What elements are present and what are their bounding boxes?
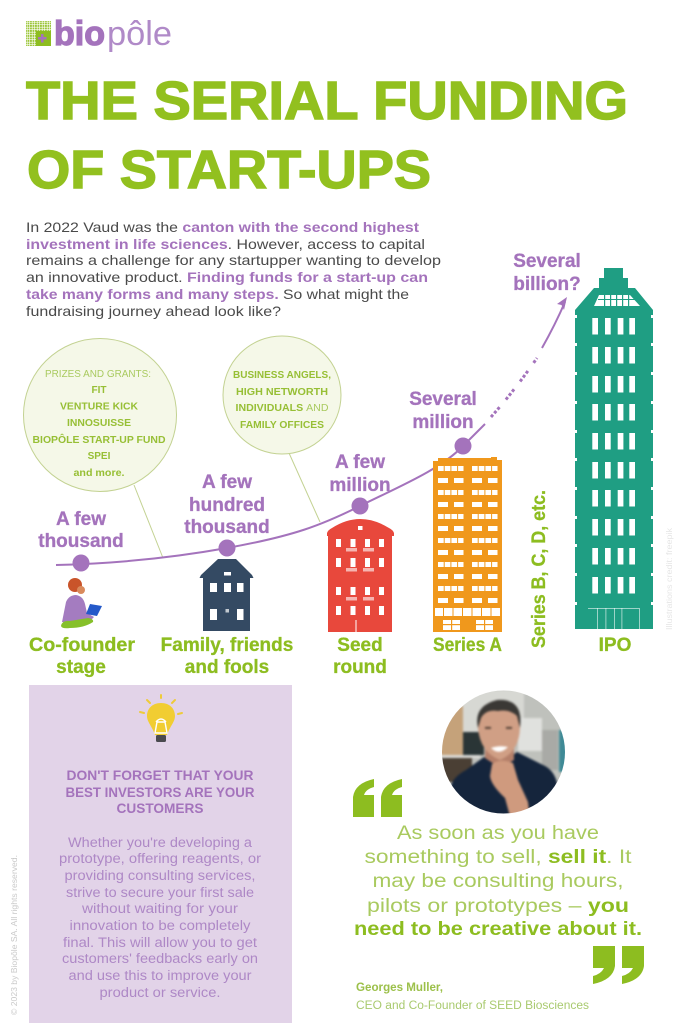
callout: business angels: INDIVIDUALS AND [236,403,328,414]
logo: biopôle: bio [54,15,105,53]
body text: first sale advice: without waiting for your [81,901,239,916]
body text: first sale advice: product or service. [100,985,220,1000]
stage labels: and fools [185,657,269,678]
body text: first sale advice: prototype, offering reagents, or [59,851,262,866]
quote text: pilots or prototypes – you [367,896,629,917]
amount labels: million [329,475,391,496]
stage labels: Series A [433,635,502,656]
callout: business angels: FAMILY OFFICES [240,420,324,431]
title [26,71,628,200]
attribution [356,982,589,1012]
icon: series A building (orange) [433,457,502,632]
attribution: Georges Muller, [356,982,443,994]
callout: prizes and grants: FIT [92,385,106,396]
amount labels: Several [409,389,477,410]
funding growth curve with arrow [56,297,567,565]
quote text [354,823,642,940]
amount labels: billion? [513,274,581,295]
callout: prizes and grants: INNOSUISSE [67,418,131,429]
amount labels: Several [513,251,581,272]
heading: investors are customers: DON'T FORGET THAT YOUR [66,768,254,783]
callout: prizes and grants: PRIZES AND GRANTS: [45,369,151,380]
intro text: investment in life sciences . However, access to capital [26,236,425,252]
intro text: an innovative product. Finding funds for a start-up can [26,269,428,285]
stage labels [29,490,631,678]
quote text: As soon as you have [397,823,599,844]
intro text: take many forms and many steps. So what might the [26,286,409,302]
icon: seed round building (red) [327,519,394,632]
illustration credit: Illustrations credit: freepik [664,527,674,630]
quote mark: opening [353,779,402,817]
amount labels: thousand [38,531,124,552]
callout: prizes and grants [24,338,176,558]
quote text: may be consulting hours, [372,871,624,892]
quote mark: closing [593,946,644,984]
heading: investors are customers [66,768,255,816]
callout: prizes and grants: BIOPÔLE START-UP FUND [32,433,166,446]
amount labels: A few [56,509,106,530]
title: THE SERIAL FUNDING [26,71,628,131]
heading: investors are customers: BEST INVESTORS ARE YOUR [66,785,255,800]
body text: first sale advice: final. This will allow you to get [63,935,257,950]
logo: biopôle [26,15,172,53]
body text: first sale advice [59,835,262,1000]
callout: prizes and grants: SPEI [88,451,111,462]
stage labels: Family, friends [161,635,293,656]
stage labels: Seed [337,635,383,656]
photo: Georges Muller [442,690,565,814]
intro text [26,219,441,319]
quote text: something to sell, sell it . It [364,847,632,868]
amount labels [38,251,581,552]
stage labels: round [333,657,387,678]
intro text: remains a challenge for any startupper wanting to develop [26,252,441,268]
logo: biopôle: pôle [107,15,172,53]
stage labels: Co-founder [29,635,136,656]
icon: light bulb [140,695,182,742]
stage labels: Series B, C, D, etc. [529,490,550,648]
callout: prizes and grants: and more. [74,468,125,479]
icon: co-founder with laptop [61,578,102,628]
body text: first sale advice: strive to secure your first sale [66,885,254,900]
body text: first sale advice: innovation to be completely [70,918,251,933]
amount labels: A few [202,472,252,493]
amount labels: hundred [189,495,265,516]
callout: business angels: BUSINESS ANGELS, [233,370,331,381]
quote text: need to be creative about it. [354,919,642,940]
stage labels: stage [56,657,106,678]
panel: investor tip [29,685,292,1023]
body text: first sale advice: Whether you're developing a [68,835,253,850]
title: OF START-UPS [27,140,431,200]
body text: first sale advice: customers' feedbacks early on [62,951,258,966]
intro text: In 2022 Vaud was the canton with the second highest [26,219,419,235]
amount labels: million [412,412,474,433]
callout: business angels: HIGH NETWORTH [236,387,328,398]
amount labels: thousand [184,517,270,538]
body text: first sale advice: providing consulting services, [64,868,255,883]
amount labels: A few [335,452,385,473]
icon: IPO tower (teal) [575,268,653,629]
intro text: fundraising journey ahead look like? [26,303,281,319]
icon: family house (navy) [200,559,254,631]
attribution: CEO and Co-Founder of SEED Biosciences [356,1000,589,1012]
body text: first sale advice: and use this to improve your [68,968,252,983]
stage labels: IPO [599,635,631,656]
curve milestones [72,438,472,572]
heading: investors are customers: CUSTOMERS [116,801,204,816]
copyright: © 2023 by Biopôle SA. All rights reserved. [9,855,19,1015]
callout: business angels [223,336,341,522]
callout: prizes and grants: VENTURE KICK [60,402,139,412]
